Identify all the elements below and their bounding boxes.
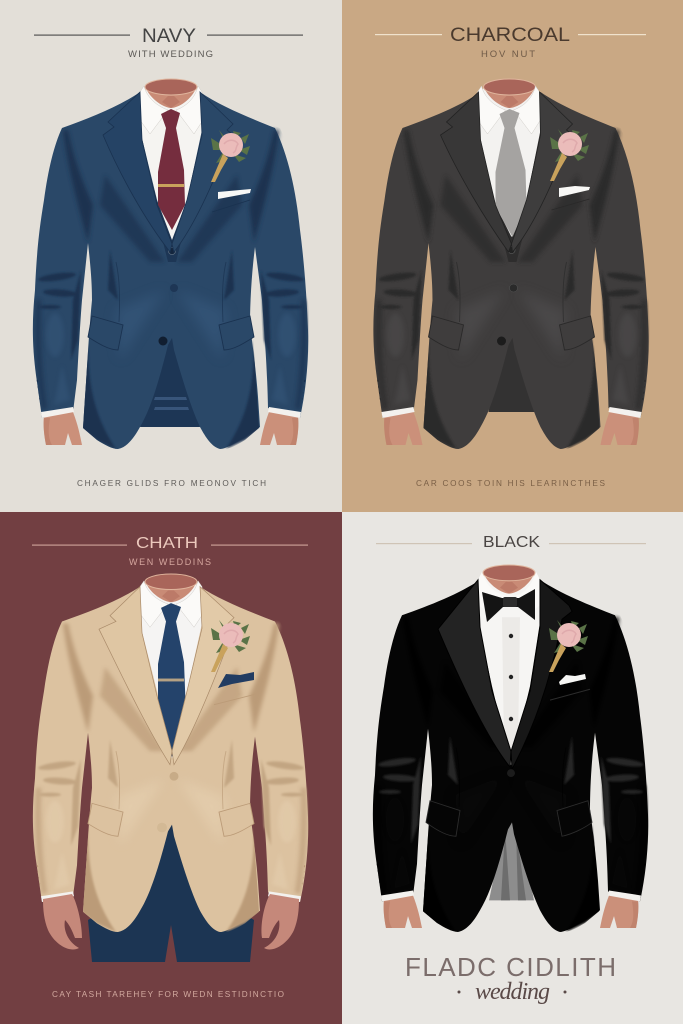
panel: black tuxedo [342,512,683,1024]
right cuff and hand [260,407,301,445]
jacket button [507,769,515,777]
right jacket shading [177,130,307,449]
chest pocket [214,694,256,705]
jacket buttons [157,772,178,832]
jacket buttons [158,284,178,346]
jacket [33,92,308,449]
collar [478,572,540,612]
shirt [140,88,202,240]
jacket buttons [497,284,518,346]
left jacket shading [375,617,505,932]
tie clip [158,679,184,681]
jacket [373,580,648,932]
right lapel [172,587,234,765]
navy panel background [0,0,342,512]
neck [145,574,197,602]
collar [478,86,540,134]
navy title lines and heading: NAVY [142,25,196,47]
tie clip [158,184,184,187]
closing script word: wedding [475,979,550,1005]
right flap [219,803,254,836]
neck [145,79,197,108]
left cuff and hand [41,407,82,445]
vest button [168,247,176,255]
shirt placket [502,617,520,765]
left cuff [41,891,74,902]
collar [140,86,203,134]
shirt [140,583,202,759]
navy subtitle: WITH WEDDING [128,49,213,60]
right lapel [512,92,572,252]
right cuff [268,891,301,902]
right jacket shading [177,623,307,932]
beige pocket square [218,672,254,688]
chest pocket [212,200,250,212]
left jacket shading [35,623,165,932]
charcoal subtitle: HOV NUT [481,49,535,60]
closing script word [458,979,566,1005]
jacket [373,92,649,449]
navy caption: CHAGER GLIDS FRO MEONOV TICH [77,479,266,488]
panel: beige suit [0,512,342,1024]
left hand [43,894,82,949]
panel: charcoal suit [342,0,683,512]
charcoal title lines and heading: CHARCOAL [450,24,570,46]
panel: navy suit [0,0,342,512]
vest stripes [154,397,189,410]
neck [483,565,535,594]
bow tie [482,589,535,622]
closing title: FLADC CIDLITH [405,952,616,982]
navy pocket square [218,189,251,199]
vest V [490,190,534,262]
vest lower [488,300,536,412]
right lapel [172,92,233,252]
left cuff and hand [382,407,422,445]
left lapel [440,92,512,252]
tie [496,109,526,237]
charcoal caption: CAR COOS TOIN HIS LEARINCTHES [416,479,606,488]
right flap [560,316,594,350]
vest and lower panel [140,300,200,427]
right hand [261,894,299,949]
grey vest lower [489,810,534,900]
chest pocket [552,199,590,210]
beige suit illustration [33,574,308,932]
charcoal suit illustration [373,79,649,449]
beige caption: CAY TASH TAREHEY FOR WEDN ESTIDINCTIO [52,990,284,999]
right lapel [511,580,572,769]
neck [484,79,536,108]
jacket [33,587,308,932]
tuxedo illustration [373,565,648,932]
beige subtitle: WEN WEDDINS [129,557,211,567]
left jacket shading [376,130,506,449]
left flap [428,316,464,350]
left flap [88,316,123,350]
charcoal boutonniere [550,129,589,181]
beige boutonniere [211,620,250,672]
navy suit illustration [33,79,308,449]
left flap [426,801,460,836]
left lapel [103,92,172,252]
tie [158,109,185,230]
navy trousers [88,815,254,962]
left lapel [99,587,172,765]
right jacket shading [517,617,647,932]
vest V [150,190,194,262]
black pocket square [559,674,586,685]
vest button [508,246,515,254]
left jacket shading [35,130,165,449]
black title lines and heading: BLACK [483,534,540,551]
right jacket shading [518,130,647,449]
left cuff and hand [381,891,422,928]
left lapel [438,580,511,767]
chest pocket [550,689,590,700]
beige title lines and heading: CHATH [136,535,198,552]
shirt [478,576,540,765]
charcoal panel background [342,0,683,512]
right flap [219,316,254,350]
black panel background [342,512,683,1024]
vest pleats [501,829,526,900]
tie [158,603,186,757]
right cuff and hand [600,891,641,928]
shirt [478,88,540,237]
shirt studs [509,634,513,721]
black boutonniere [549,620,588,672]
collar [140,581,203,627]
charcoal pocket square [559,186,590,197]
left flap [88,803,123,836]
burgundy panel background [0,512,342,1024]
right flap [557,801,592,836]
navy boutonniere [211,130,250,182]
right cuff and hand [600,407,642,445]
